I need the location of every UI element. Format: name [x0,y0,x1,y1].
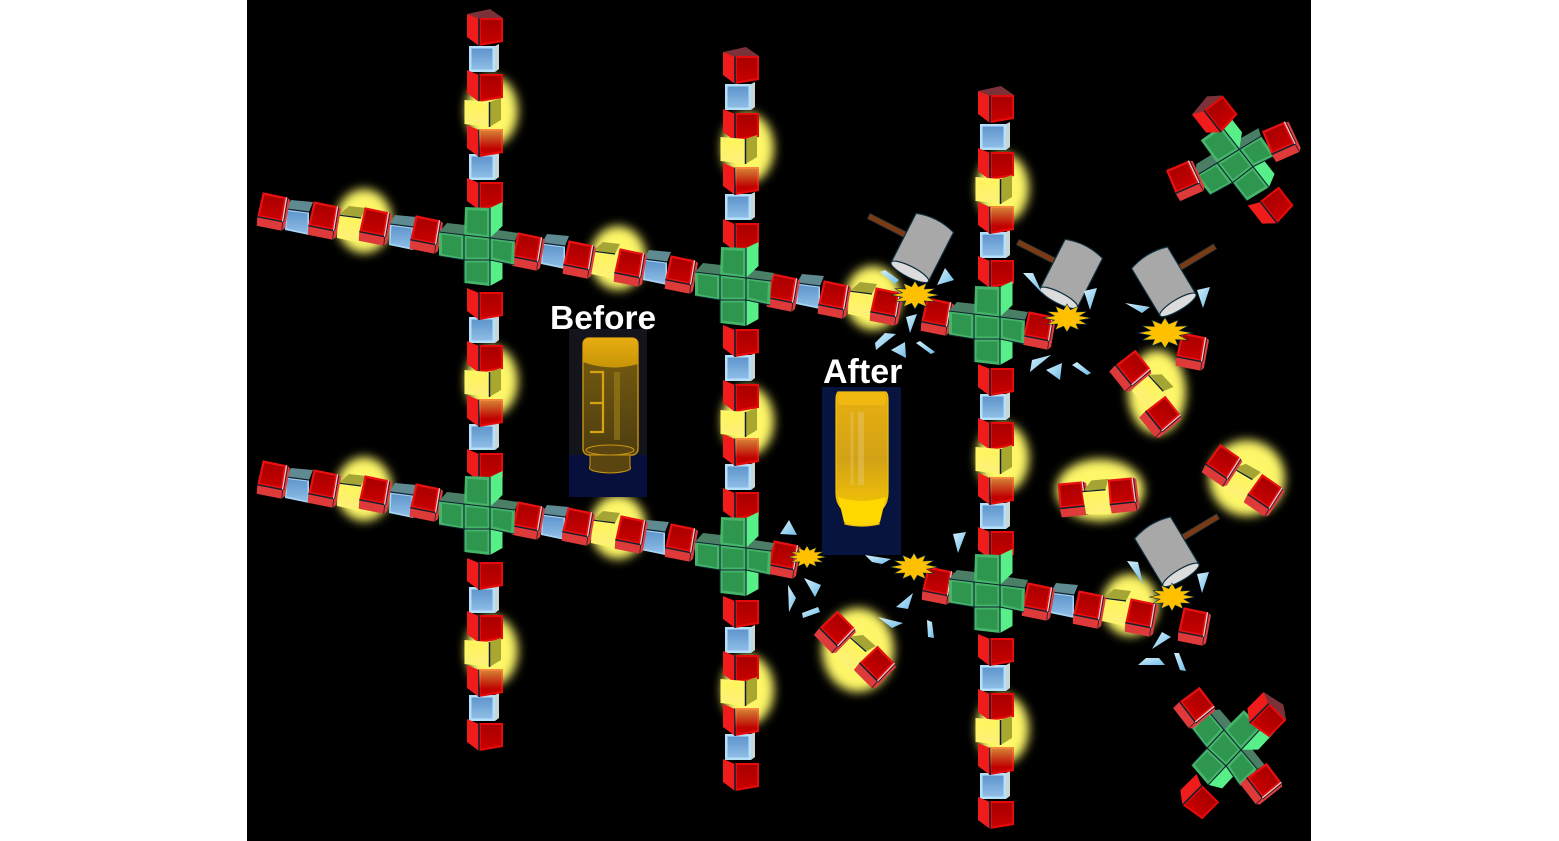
yellow fluorescence glows [336,76,1285,764]
column chain 2 [720,47,759,791]
detached cross: bottom right [1170,683,1293,822]
fragment: far right [1200,441,1287,520]
image: vial after [822,387,901,555]
label: Before: Before [550,300,656,337]
fragment: center right [1052,472,1145,522]
glass shards [780,268,1210,671]
broken-off red cubes [1176,332,1211,646]
fragment: right upper [1106,346,1186,443]
column chain 3 [976,86,1014,829]
green cross nodes [439,202,1028,633]
column chain 1 [464,9,503,751]
label: After: After [823,353,902,391]
impact bursts [788,281,1195,611]
black background panel [247,0,1311,841]
row chain 2 [257,460,1158,637]
hammers [852,192,1237,590]
detached cross: top right [1161,88,1306,231]
row chain 1 [257,192,1056,350]
fragment: lower middle [811,607,900,693]
image: vial before [569,329,647,497]
